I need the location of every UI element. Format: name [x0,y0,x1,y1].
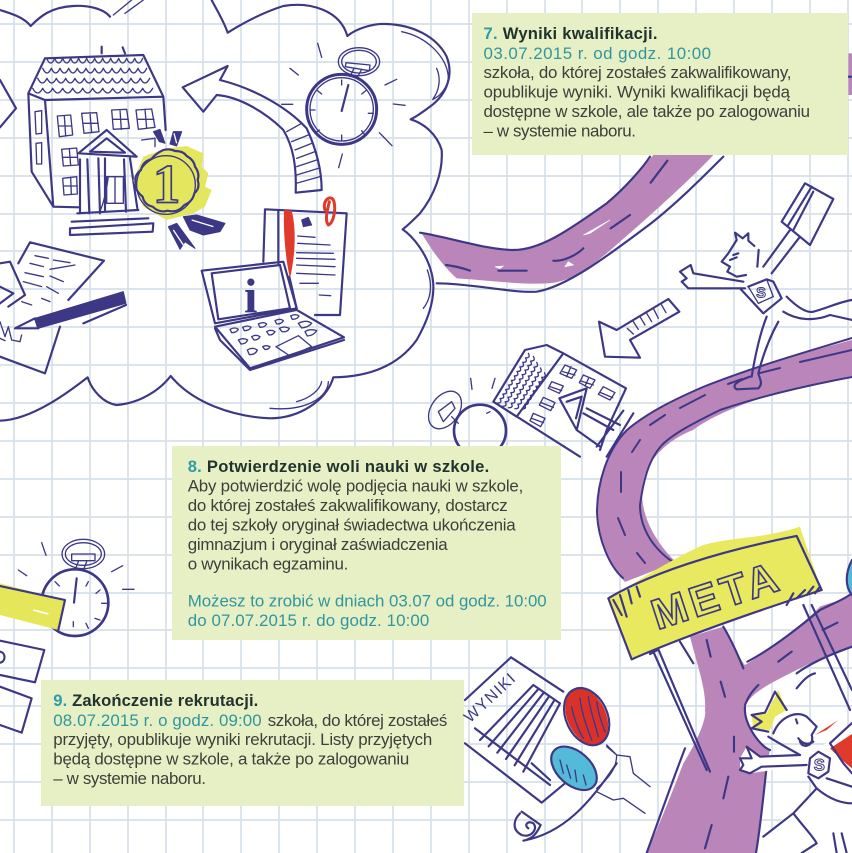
icon: gold medal with number 1 [133,129,225,249]
heading: step 7: 7. Wyniki kwalifikacji. [484,24,658,43]
results scroll with balloons [461,657,650,841]
text block: step 8: o wynikach egzaminu. [188,554,348,573]
finish banner and posts [608,527,852,772]
figure: king with crown and red cape [740,560,852,853]
text block: step 9: będą dostępne w szkole, a także po zalogowaniu [53,749,409,768]
thought cloud with illustrations [0,0,449,421]
stopwatch with yellow card [0,539,134,636]
text block: step 8: Aby potwierdzić wolę podjęcia nauki w szkole, [188,477,523,496]
icon: laptop with info symbol [202,262,344,370]
arrow: hatched arrow pointing down-left [599,299,679,358]
balloon: blue [543,738,645,813]
scroll: WYNIKI [461,671,519,726]
icon: stopwatch [282,43,405,168]
scroll [461,657,617,841]
dates: step 8: do 07.07.2015 r. do godz. 10:00 [188,611,429,630]
text block: step 9: przyjęty, opublikuje wyniki rekrutacji. Listy przyjętych [53,730,432,749]
text block: step 7: szkoła, do której zostałeś zakwalifikowany, [484,63,792,82]
panel: step 9 [41,680,464,806]
icon: tilted school building [493,345,633,457]
text block: step 9: – w systemie naboru. [53,769,206,788]
cloud outline [0,0,449,421]
banner label META: META [646,554,784,640]
text block: step 7: opublikuje wyniki. Wyniki kwalifikacji będą [484,82,791,102]
text block: step 8: do tej szkoły oryginał świadectwa ukończenia [188,516,516,535]
icon: signed papers and pen [0,242,126,373]
icon: gold medal with number 1: 1 [153,153,180,214]
date: step 7: 03.07.2015 r. od godz. 10:00 [484,44,711,63]
stopwatch near tilted school [422,378,506,457]
icon: school building [28,47,166,235]
heading: step 8: 8. Potwierdzenie woli nauki w szkole. [188,457,489,476]
text block: step 7 [484,63,810,140]
figure: running superhero with briefcase [680,183,852,389]
icon: document with clip and bookmark [263,198,347,315]
panel: step 7 [472,13,848,155]
text block: step 9 [53,711,447,788]
text block: step 7: dostępne w szkole, ale także po zalogowaniu [484,102,810,121]
road: upper purple road [420,53,852,292]
arrow: curved arrow to school [183,66,322,193]
text block: step 7: – w systemie naboru. [484,122,636,140]
road: lower trunk with branch [647,593,852,853]
icon: laptop with info symbol: i [244,270,257,323]
figure: running superhero with briefcase: S [756,286,766,302]
text block: step 8 [188,477,523,573]
dates: step 8 [188,592,547,630]
paper cards at left edge [0,641,44,733]
text block: step 9: szkoła, do której zostałeś [268,711,447,730]
panel: step 8 [172,446,561,640]
text block: step 9: 08.07.2015 r. o godz. 09:00 [53,711,262,730]
text block: step 8: do której zostałeś zakwalifikowany, dostarcz [188,496,508,515]
balloon: red [555,681,650,788]
heading: step 9: 9. Zakończenie rekrutacji. [53,691,258,710]
figure: king with crown and red cape: S [814,756,825,775]
dates: step 8: Możesz to zrobić w dniach 03.07 od godz. 10:00 [188,592,547,611]
road: right winding road to finish [597,338,852,582]
text block: step 8: gimnazjum i oryginał zaświadczenia [188,535,448,554]
